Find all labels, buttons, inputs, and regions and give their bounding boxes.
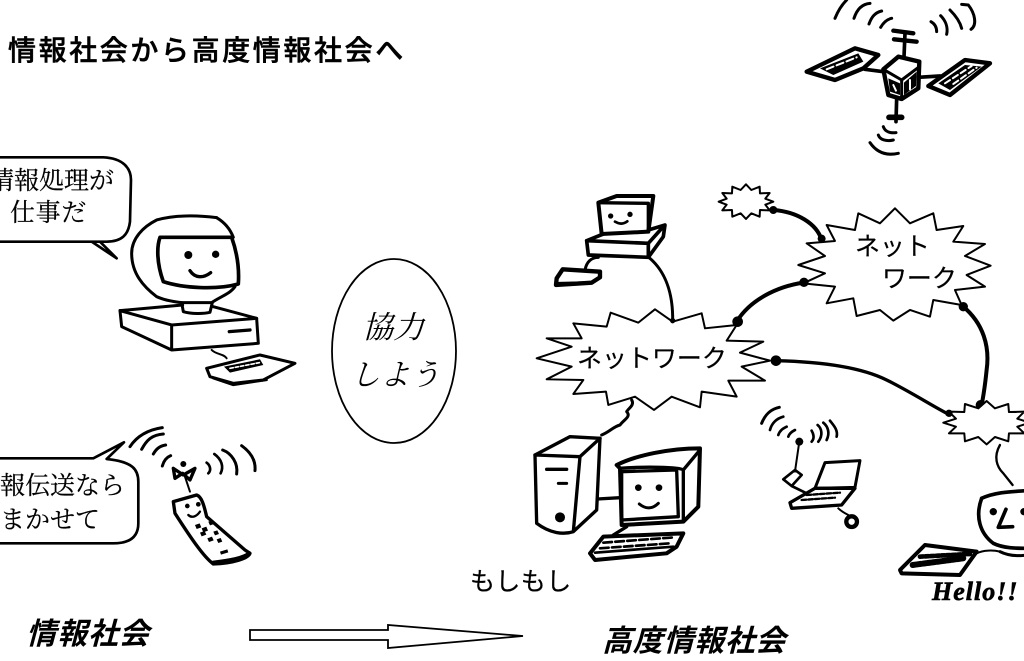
lower network scene xyxy=(535,400,1024,575)
burst: network main xyxy=(537,309,770,410)
icon: computer saying hello xyxy=(900,445,1024,575)
label: moshi moshi: もしもし xyxy=(470,568,572,596)
long link tail and node xyxy=(945,410,953,417)
network diagram xyxy=(537,184,991,415)
label: information society: 情報社会 xyxy=(24,617,157,651)
bubble text: 仕事だ xyxy=(10,199,87,227)
label: hello: Hello!! xyxy=(931,577,1018,606)
icon: desktop computer with face xyxy=(120,216,295,385)
arrow: transition to advanced society xyxy=(250,625,523,648)
network labels: ネット xyxy=(855,233,930,261)
title: 情報社会から高度情報社会へ xyxy=(8,35,406,66)
bubble text: まかせて xyxy=(0,507,100,534)
icon: small computer xyxy=(556,196,665,285)
network labels: ネットワーク xyxy=(577,345,727,373)
bubble text xyxy=(0,472,125,534)
network labels xyxy=(577,233,957,373)
icon: tower computer with monitor xyxy=(535,400,700,560)
speech bubble: information processing xyxy=(0,157,131,258)
icon: satellite xyxy=(807,0,990,154)
callout: let's cooperate: しよう xyxy=(348,358,447,392)
speech bubble: information transmission xyxy=(0,442,138,543)
callout: let's cooperate xyxy=(332,259,456,443)
network links xyxy=(585,210,987,415)
icon: mobile phone xyxy=(130,428,255,564)
label: advanced information society: 高度情報社会 xyxy=(600,624,793,658)
callout: let's cooperate: 協力 xyxy=(360,310,431,345)
bubble text xyxy=(0,167,114,227)
burst: small top xyxy=(719,184,773,219)
link nodes xyxy=(670,206,986,410)
burst: network upper xyxy=(798,208,991,321)
icon: laptop with antenna xyxy=(762,407,860,527)
burst: small right xyxy=(943,401,1024,444)
network labels: ワーク xyxy=(882,265,957,293)
